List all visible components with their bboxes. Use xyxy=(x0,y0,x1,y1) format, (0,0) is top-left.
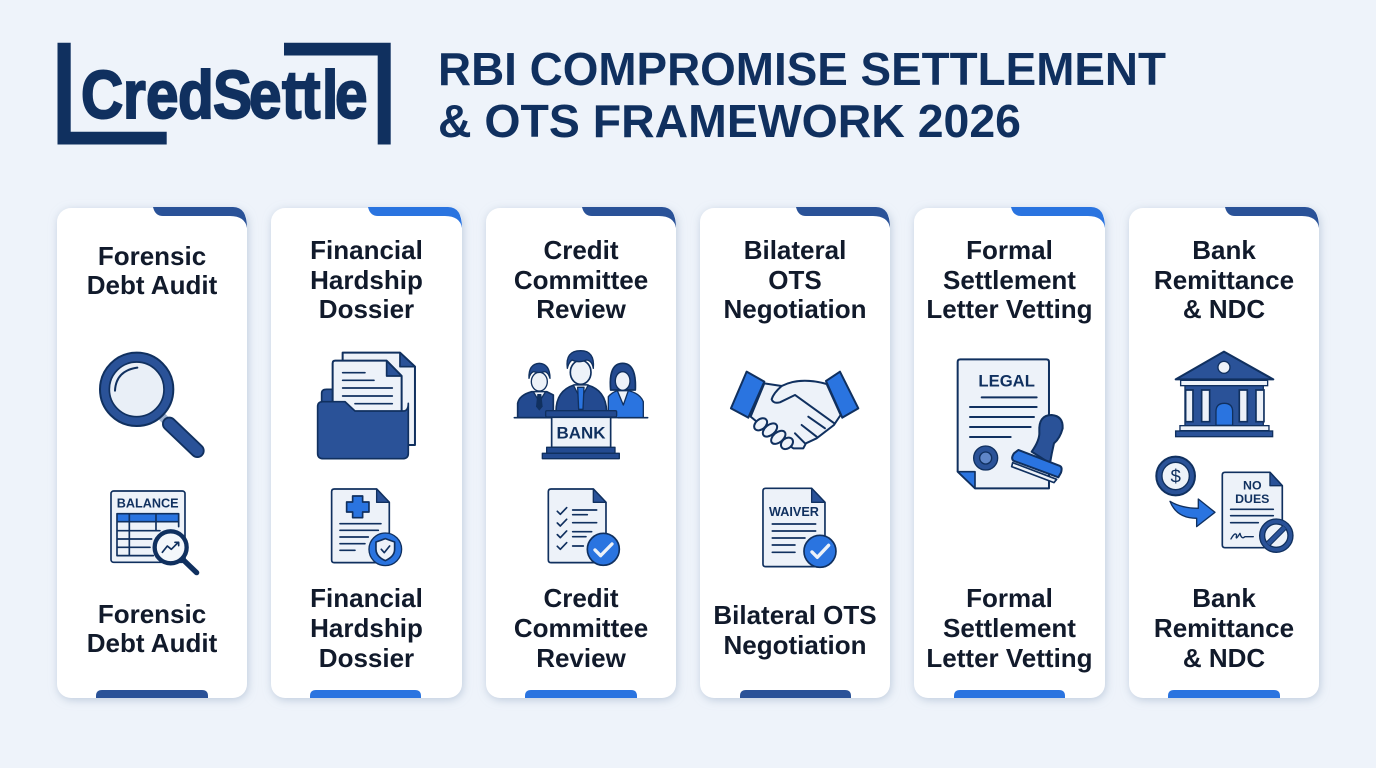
panel: bank remittance and NDC: Bank xyxy=(1192,235,1256,265)
heading: bottom label xyxy=(713,600,877,660)
heading: bottom label: Formal xyxy=(966,583,1053,613)
heading: bottom label: & NDC xyxy=(1183,643,1265,673)
heading: bottom label: Settlement xyxy=(943,613,1076,643)
icon: bank committee at podium xyxy=(514,351,648,459)
icon: payment to no dues certificate: DUES xyxy=(1235,492,1269,506)
panel: forensic debt audit: Debt Audit xyxy=(87,270,218,300)
panel: credit committee review: Committee xyxy=(514,265,648,295)
panel: bank remittance and NDC: & NDC xyxy=(1183,294,1265,324)
heading: bottom label: Remittance xyxy=(1154,613,1294,643)
icon: balance sheet audit xyxy=(111,491,197,573)
heading: bottom label: Review xyxy=(536,643,627,673)
icon: balance sheet audit: BALANCE xyxy=(117,496,179,510)
panel: bilateral OTS negotiation: OTS xyxy=(768,265,822,295)
panel: formal settlement letter vetting: Letter Vetting xyxy=(926,294,1093,324)
panel: forensic debt audit: Forensic xyxy=(98,241,206,271)
icon: checklist with tick xyxy=(548,489,619,565)
icon: folder with documents xyxy=(318,353,415,459)
heading: bottom label: Dossier xyxy=(319,643,414,673)
title xyxy=(438,43,1166,147)
title: RBI COMPROMISE SETTLEMENT xyxy=(438,43,1166,95)
logo: CredSettle xyxy=(58,43,391,145)
panel: forensic debt audit xyxy=(57,207,247,698)
panel: bilateral OTS negotiation xyxy=(700,207,890,698)
panel: formal settlement letter vetting: Formal xyxy=(966,235,1053,265)
heading: bottom label: Debt Audit xyxy=(87,628,218,658)
icon: legal document and stamp: LEGAL xyxy=(978,372,1035,391)
icon: bank building xyxy=(1176,352,1273,437)
icon: payment to no dues certificate xyxy=(1156,457,1293,552)
icon: medical report with shield xyxy=(332,489,402,566)
panel: bank remittance and NDC: Remittance xyxy=(1154,265,1294,295)
heading: bottom label: Hardship xyxy=(310,613,423,643)
icon: handshake xyxy=(731,372,858,451)
panel: financial hardship dossier: Hardship xyxy=(310,265,423,295)
heading: bottom label xyxy=(1154,583,1294,673)
panel: financial hardship dossier: Dossier xyxy=(319,294,414,324)
icon: payment to no dues certificate: NO xyxy=(1243,478,1262,492)
heading: bottom label: Committee xyxy=(514,613,648,643)
panel: financial hardship dossier xyxy=(271,207,462,698)
heading: bottom label: Credit xyxy=(543,583,619,613)
heading: bottom label: Bank xyxy=(1192,583,1256,613)
panel: credit committee review xyxy=(486,207,676,698)
panel: financial hardship dossier: Financial xyxy=(310,235,423,265)
heading: bottom label: Forensic xyxy=(98,599,206,629)
icon: legal document and stamp xyxy=(958,359,1063,488)
icon: waiver document: WAIVER xyxy=(769,505,819,519)
heading: bottom label: Letter Vetting xyxy=(926,643,1093,673)
panel: bank remittance and NDC xyxy=(1129,207,1319,698)
panel: formal settlement letter vetting xyxy=(914,207,1105,698)
panel: credit committee review: Credit xyxy=(543,235,619,265)
panel: formal settlement letter vetting: Settlement xyxy=(943,265,1076,295)
heading: bottom label xyxy=(514,583,648,673)
heading: bottom label: Bilateral OTS xyxy=(713,600,877,630)
logo: CredSettle: CredSettle xyxy=(81,58,367,133)
icon: payment to no dues certificate: $ xyxy=(1170,466,1181,487)
panel: credit committee review: Review xyxy=(536,294,627,324)
icon: waiver document xyxy=(763,488,836,567)
heading: bottom label xyxy=(926,583,1093,673)
heading: bottom label: Financial xyxy=(310,583,423,613)
heading: bottom label xyxy=(310,583,423,673)
title: & OTS FRAMEWORK 2026 xyxy=(438,95,1021,147)
heading: bottom label: Negotiation xyxy=(724,630,866,660)
panel: bilateral OTS negotiation: Bilateral xyxy=(744,235,846,265)
heading: bottom label xyxy=(87,599,218,658)
panel: bilateral OTS negotiation: Negotiation xyxy=(724,294,866,324)
icon: magnifying glass xyxy=(100,353,197,451)
icon: bank committee at podium: BANK xyxy=(556,424,606,443)
